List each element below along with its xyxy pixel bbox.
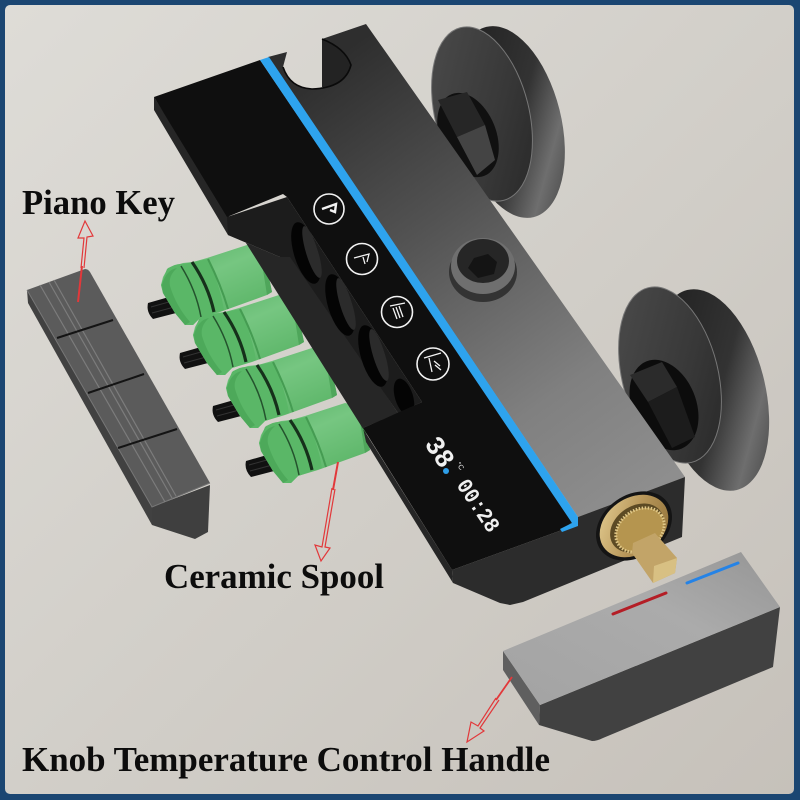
handle left face [503,651,540,725]
label: handle: Knob Temperature Control Handle [22,740,550,779]
body left thickness [154,97,453,583]
lower hex nut [630,362,695,448]
temperature readout: 38 [417,432,459,475]
digital display [417,432,504,538]
icon: rain shower [382,296,412,328]
handle front face [539,607,780,741]
key top face [27,269,210,507]
upper mounting wheel [415,15,583,229]
upper hex nut [438,92,495,175]
label: ceramic spool: Ceramic Spool [164,557,384,596]
mode icons [314,194,449,380]
time readout: 00:28 [450,475,504,538]
celsius sign: °C [454,461,465,472]
key edge highlight [27,290,210,507]
lower mounting wheel [602,276,788,503]
arrow: handle [467,677,512,742]
piano key bar [27,269,210,539]
lower collar [617,349,711,461]
red hot mark [613,593,666,614]
key gaps [57,320,177,448]
valve holes [285,219,418,418]
holder slot wall [322,39,351,87]
side face with holes [227,197,422,413]
hex socket bolt [449,238,517,302]
key grooves [40,280,176,502]
brass valve stem [583,477,685,583]
gray top face [268,24,685,517]
black control panel [154,60,573,570]
blue cold mark [687,563,738,583]
label: piano key: Piano Key [22,184,175,222]
icon: spout [346,244,378,274]
blue droplet [443,468,449,474]
arrow: piano key [78,221,93,302]
handle top face [503,552,780,705]
holder slot rim [283,39,351,89]
key side face [27,290,152,525]
temperature control handle [503,552,780,741]
blue light strip [260,57,578,532]
upper collar [426,84,510,186]
key end face [152,485,210,539]
green ceramic spools [148,245,370,483]
icon: wall shower [417,348,449,380]
icon: hand shower [314,194,344,224]
arrow: ceramic spool [315,462,338,561]
shower panel body [154,24,685,605]
front end face [452,477,685,605]
